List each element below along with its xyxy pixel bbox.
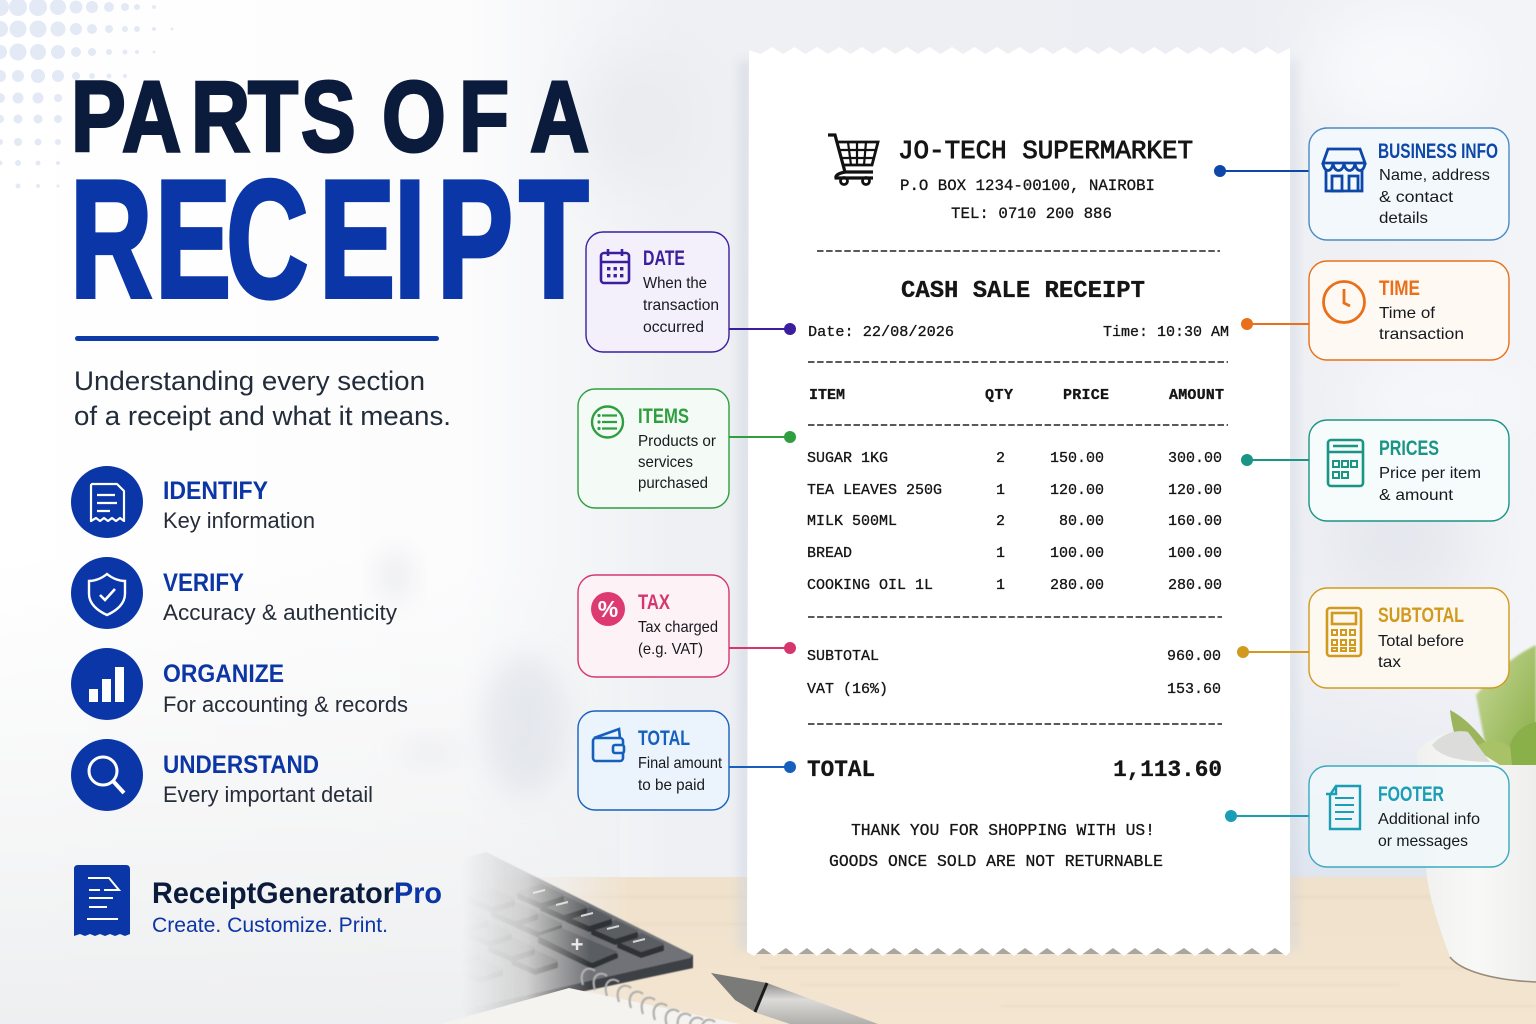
callout: date [586,232,796,352]
item rows: 300.00 [1168,450,1222,467]
receipt footer message: GOODS ONCE SOLD ARE NOT RETURNABLE [829,852,1163,871]
date and time line: Time: 10:30 AM [1103,323,1229,341]
item table header [809,387,1224,404]
callout: total: Final amount [638,755,722,772]
callout: footer: or messages [1378,833,1468,850]
benefit: identify: Key information [163,508,315,533]
benefit: organize [71,648,408,720]
item rows: 100.00 [1168,545,1222,562]
callout: business info: & contact [1379,189,1454,206]
brand logo [74,865,442,937]
grand total [807,757,1222,783]
item rows: 1 [996,577,1005,594]
receipt footer message: THANK YOU FOR SHOPPING WITH US! [851,821,1155,840]
notebook with spiral [440,969,740,1024]
item table header: AMOUNT [1169,387,1224,404]
grand total: TOTAL [807,757,875,783]
callout: tax: % [598,596,618,622]
subtitle [74,366,451,431]
benefit: identify: IDENTIFY [163,477,268,505]
brand logo: Create. Customize. Print. [152,914,388,937]
callout: tax: Tax charged [638,619,718,636]
callout: total: TOTAL [638,727,690,750]
benefit: organize: ORGANIZE [163,660,284,688]
callout: date: occurred [643,319,704,336]
pen [711,973,878,1024]
item rows: 150.00 [1050,450,1104,467]
item table header: PRICE [1063,387,1109,404]
callout: prices [1241,420,1509,521]
callout: subtotal: Total before [1378,633,1464,650]
item table header: QTY [985,387,1013,404]
receipt header [898,136,1193,223]
wooden desk [544,877,1536,1024]
subtotal and VAT: VAT (16%) [807,681,888,698]
calculator: + [571,932,583,957]
receipt paper [738,47,1298,956]
title divider [75,336,439,341]
item rows: 120.00 [1050,482,1104,499]
callout: total: to be paid [638,777,705,794]
callout: footer [1225,766,1509,867]
callout: total [578,711,796,810]
callout: business info: details [1379,210,1428,227]
title [70,61,589,333]
calculator [474,852,694,1014]
title: PARTS OF A [71,61,589,173]
callout: items [578,389,796,508]
benefit: understand: Every important detail [163,782,373,807]
receipt heading: CASH SALE RECEIPT [901,278,1145,305]
callout: tax: TAX [638,591,670,614]
brand logo: Pro [394,877,442,910]
benefit: understand [71,739,373,811]
item rows: MILK 500ML [807,513,897,530]
callout: subtotal [1237,588,1509,688]
item rows: TEA LEAVES 250G [807,482,942,499]
callout: prices: & amount [1379,487,1454,504]
date and time line: Date: 22/08/2026 [808,323,954,341]
item rows: 2 [996,450,1005,467]
subtotal and VAT [807,648,1221,698]
item rows: 160.00 [1168,513,1222,530]
item rows: BREAD [807,545,852,562]
subtotal and VAT: 153.60 [1167,681,1221,698]
callout: items: services [638,454,693,471]
receipt header: P.O BOX 1234-00100, NAIROBI [900,177,1155,195]
callout: time: TIME [1379,277,1420,300]
callout: footer: Additional info [1378,811,1480,828]
callout: time: Time of [1379,305,1436,322]
item rows: 2 [996,513,1005,530]
subtotal and VAT: 960.00 [1167,648,1221,665]
item rows: 280.00 [1168,577,1222,594]
item rows: 100.00 [1050,545,1104,562]
callout: subtotal: tax [1378,654,1401,671]
item rows [807,450,1222,594]
callout: date: DATE [643,247,685,270]
callout: items: ITEMS [638,405,689,428]
callout: date: transaction [643,297,719,314]
benefit: verify: VERIFY [163,569,244,597]
brand logo: ReceiptGenerator [152,877,394,910]
callout: business info: Name, address [1379,167,1490,184]
receipt header: TEL: 0710 200 886 [951,205,1112,223]
item rows: SUGAR 1KG [807,450,888,467]
halftone dot pattern [0,0,174,188]
item rows: COOKING OIL 1L [807,577,933,594]
item rows: 1 [996,482,1005,499]
item rows: 1 [996,545,1005,562]
subtitle: of a receipt and what it means. [74,401,451,431]
benefit: organize: For accounting & records [163,692,408,717]
callout: business info [1214,128,1509,240]
grand total: 1,113.60 [1113,757,1222,783]
callout: date: When the [643,275,707,292]
subtotal and VAT: SUBTOTAL [807,648,879,665]
benefit: understand: UNDERSTAND [163,751,319,779]
item rows: 280.00 [1050,577,1104,594]
plant pot with succulent [1417,645,1536,982]
item rows: 80.00 [1059,513,1104,530]
callout: footer: FOOTER [1378,783,1444,806]
receipt footer message [829,821,1163,871]
receipt header: JO-TECH SUPERMARKET [898,136,1193,166]
subtitle: Understanding every section [74,366,425,396]
item table header: ITEM [809,387,845,404]
callout: items: purchased [638,475,708,492]
callout: time: transaction [1379,326,1464,343]
callout: tax: (e.g. VAT) [638,641,703,658]
callout: time [1241,261,1509,360]
date and time line [808,323,1229,341]
callout: subtotal: SUBTOTAL [1378,604,1464,627]
benefit: identify [71,466,315,538]
callout: items: Products or [638,433,717,450]
callout: prices: PRICES [1379,437,1439,460]
benefit: verify: Accuracy & authenticity [163,600,397,625]
callout: prices: Price per item [1379,465,1481,482]
callout: tax [578,575,796,677]
icon: shopping cart [828,135,878,184]
title: RECEIPT [70,146,589,333]
benefit: verify [71,557,397,629]
item rows: 120.00 [1168,482,1222,499]
